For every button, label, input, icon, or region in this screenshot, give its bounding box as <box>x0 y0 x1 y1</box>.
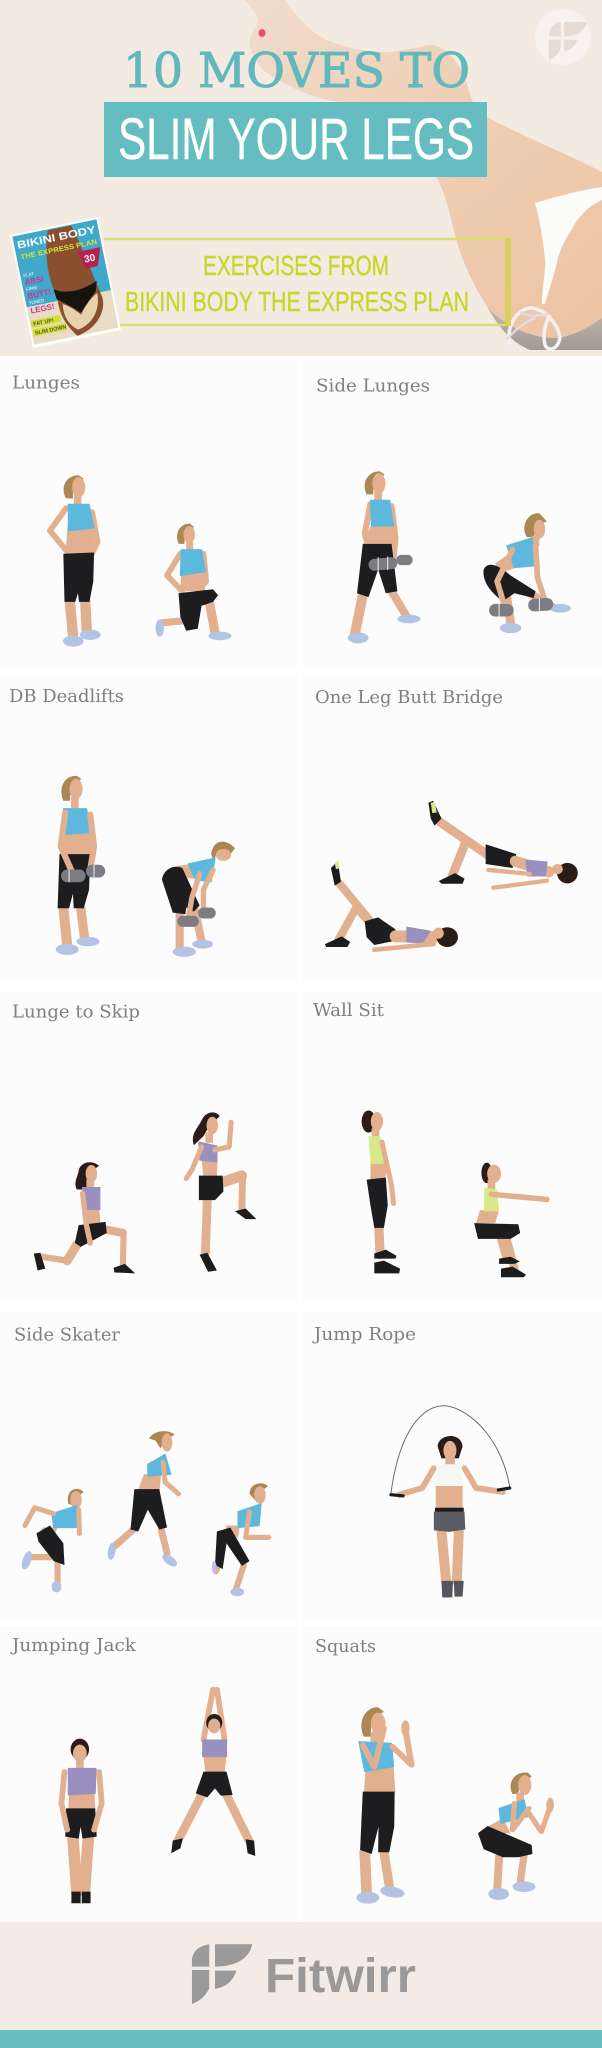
subtitle frame: BIKINI BODY THE EXPRESS PLAN <box>125 286 469 317</box>
figure: jack standing <box>61 1739 102 1903</box>
panel: one leg butt bridge <box>303 676 602 980</box>
panel: jumping jack <box>0 1626 298 1922</box>
figure: skater right <box>212 1483 269 1596</box>
subtitle frame: EXERCISES FROM <box>203 250 389 281</box>
book cover: TONED <box>28 298 46 306</box>
logo mark <box>192 1944 252 2004</box>
panel: db deadlifts <box>0 676 298 980</box>
photo: legs <box>245 0 602 350</box>
heading: jumping jack: Jumping Jack <box>10 1635 137 1656</box>
bottom teal bar <box>0 2030 602 2048</box>
book cover: FLAT <box>23 271 35 278</box>
rope <box>391 1406 510 1494</box>
footer <box>0 1922 602 2030</box>
figure: wall sit squat <box>474 1163 547 1277</box>
title banner: SLIM YOUR LEGS <box>118 107 474 172</box>
panel: wall sit <box>303 992 602 1300</box>
book cover: FAT UP! <box>33 318 55 328</box>
figure: skip <box>186 1112 256 1272</box>
book cover <box>10 217 121 348</box>
figure: side lunges squat <box>483 513 571 633</box>
book cover: 30 <box>83 253 97 266</box>
figure: jack jumping <box>171 1689 255 1856</box>
panel: lunges <box>0 360 298 666</box>
figure: lunges standing <box>50 475 101 647</box>
figure: squat down <box>478 1772 554 1900</box>
book cover: LEGS! <box>30 302 55 316</box>
heading: squats: Squats <box>315 1636 376 1657</box>
figure: lunges down <box>155 524 231 640</box>
panel: side lunges <box>303 360 602 666</box>
panel: squats <box>303 1626 602 1922</box>
header panel <box>0 0 602 356</box>
heading: wall sit: Wall Sit <box>313 1000 385 1021</box>
book cover: BUTT! <box>27 287 52 301</box>
panel: lunge to skip <box>0 992 298 1300</box>
panel: jump rope <box>303 1312 602 1620</box>
heading: jump rope: Jump Rope <box>312 1324 416 1345</box>
book cover: FIRM <box>26 285 38 292</box>
title banner <box>104 102 487 177</box>
figure: jump rope <box>391 1406 510 1597</box>
panel: side skater <box>0 1312 298 1620</box>
book cover: THE EXPRESS PLAN <box>20 239 98 261</box>
figure: squat standing <box>356 1707 412 1904</box>
figure: wall sit standing <box>362 1110 400 1273</box>
logo wordmark: Fitwirr <box>265 1950 416 2003</box>
figure: deadlift standing <box>56 776 99 955</box>
logo badge <box>535 9 591 65</box>
figure: lunge <box>34 1162 135 1273</box>
figure: bridge raised <box>428 801 578 888</box>
heading: db deadlifts: DB Deadlifts <box>9 686 124 707</box>
figure: deadlift bent <box>162 842 235 957</box>
title line 1: 10 MOVES TO <box>123 43 470 99</box>
figure: side lunges standing <box>348 471 420 643</box>
figure: skater middle <box>106 1431 179 1569</box>
subtitle frame <box>104 238 508 326</box>
book cover: ABS! <box>24 274 45 287</box>
heading: lunge to skip: Lunge to Skip <box>12 1002 140 1022</box>
heading: lunges: Lunges <box>12 372 80 394</box>
book cover: SLIM DOWN <box>35 324 67 337</box>
heading: one leg butt bridge: One Leg Butt Bridge <box>315 687 503 708</box>
heading: side skater: Side Skater <box>14 1324 120 1346</box>
figure: skater left <box>20 1489 84 1592</box>
heading: side lunges: Side Lunges <box>316 376 430 396</box>
book cover: BIKINI BODY <box>16 224 97 252</box>
figure: bridge lying <box>325 861 458 950</box>
